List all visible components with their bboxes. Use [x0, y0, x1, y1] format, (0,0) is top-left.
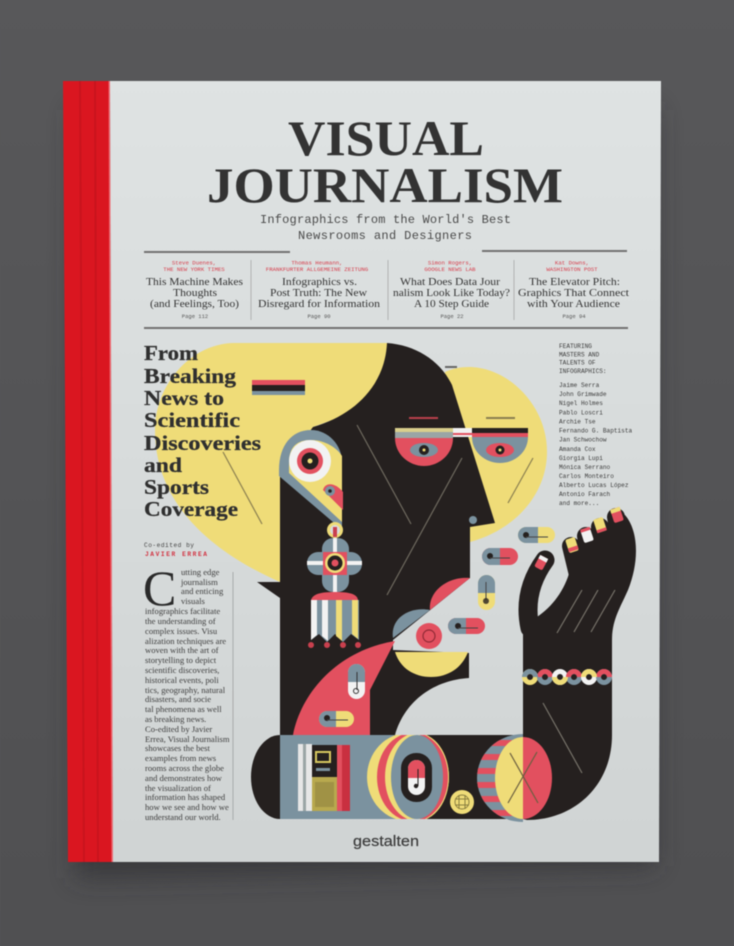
body text: understand our world.: [145, 812, 221, 822]
body text: storytelling to depict: [145, 655, 217, 665]
article teaser: data journalism: Simon Rogers,: [428, 260, 472, 266]
article teaser: infographics vs post truth: [258, 260, 380, 320]
book motif: [298, 744, 350, 811]
featured contributors list: Antonio Farach: [559, 491, 611, 498]
article teaser: elevator pitch: Page 94: [562, 313, 586, 320]
headline: From: [144, 341, 199, 365]
featured contributors list: [559, 343, 632, 507]
subtitle: [260, 213, 511, 243]
featured contributors list: Amanda Cox: [559, 446, 596, 453]
concentric lens: [367, 733, 449, 821]
subtitle: Newsrooms and Designers: [298, 229, 472, 243]
headline: [144, 341, 261, 521]
headline: Discoveries: [144, 431, 261, 455]
front eye left: [395, 417, 473, 466]
body text: as breaking news.: [145, 714, 206, 724]
featured contributors list: INFOGRAPHICS:: [559, 368, 607, 375]
body text: complex issues. Visu: [145, 626, 218, 636]
body text: historical events, poli: [145, 675, 219, 685]
headline: Coverage: [144, 497, 238, 521]
headline: News to: [144, 386, 224, 410]
article teaser: elevator pitch: with Your Audience: [527, 299, 621, 310]
chin semicircle: [393, 609, 430, 638]
body text: showcases the best: [145, 743, 211, 753]
red crescent: [293, 641, 395, 735]
publisher name: gestalten: [353, 833, 419, 850]
body text: scientific discoveries,: [145, 665, 219, 675]
nostril: [469, 516, 477, 524]
body text: utting edge: [181, 567, 220, 577]
headline: Breaking: [144, 364, 237, 388]
red book spine: [63, 81, 113, 862]
article teaser: infographics vs post truth: Thomas Heumann,: [291, 260, 343, 266]
body text: how we see and how we: [145, 802, 229, 812]
article teaser: this machine makes thoughts: This Machine Makes: [146, 277, 243, 288]
featured contributors list: Jan Schwochow: [559, 436, 607, 444]
featured contributors list: Pablo Loscri: [559, 410, 603, 416]
article teaser: infographics vs post truth: Disregard for Information: [258, 299, 380, 310]
earring: [307, 522, 362, 648]
featured contributors list: Alberto Lucas López: [559, 482, 629, 489]
bracelet: [524, 672, 610, 682]
yellow face circle: [445, 367, 547, 542]
hairlines: [223, 367, 533, 595]
body text: and demonstrates how: [145, 773, 223, 783]
featured contributors list: Jaime Serra: [559, 382, 600, 389]
body text: the visualization of: [145, 783, 211, 793]
featured contributors list: Carlos Monteiro: [559, 473, 614, 480]
article teaser: elevator pitch: Graphics That Connect: [518, 288, 629, 299]
yellow half circle: [395, 652, 468, 677]
headline: Scientific: [144, 408, 240, 432]
body text: information has shaped: [145, 792, 226, 802]
article teaser: data journalism: What Does Data Jour: [400, 277, 501, 288]
featured contributors list: Mónica Serrano: [559, 464, 611, 471]
article teaser: elevator pitch: Kat Downs,: [555, 260, 589, 266]
body text: [145, 567, 230, 822]
fingernails: [534, 507, 624, 571]
body text: tal phenomena as well: [145, 704, 222, 714]
article teaser: this machine makes thoughts: Thoughts: [173, 288, 217, 299]
arm and hand: [523, 507, 636, 820]
title: VISUAL: [288, 110, 484, 166]
dash bars: [252, 380, 305, 395]
editor credit: [144, 542, 207, 558]
editor credit: JAVIER ERREA: [145, 551, 207, 558]
body text: Co-edited by Javier: [145, 724, 212, 734]
article teaser: elevator pitch: The Elevator Pitch:: [529, 277, 620, 288]
featured contributors list: Nigel Holmes: [559, 400, 603, 407]
body text: alization techniques are: [145, 636, 226, 646]
article teaser: this machine makes thoughts: Page 112: [182, 313, 208, 320]
pills: [319, 527, 555, 727]
article teaser: data journalism: [393, 260, 511, 320]
bottom band: [251, 735, 523, 819]
headline: and: [144, 453, 182, 477]
body text: examples from news: [145, 753, 217, 763]
drop cap: C: [143, 560, 176, 616]
front eye right: [472, 417, 528, 463]
article teaser: data journalism: nalism Look Like Today?: [393, 288, 511, 299]
featured contributors list: Giorgia Lupi: [559, 455, 603, 462]
body text: rooms across the globe: [145, 763, 224, 773]
book cover scene: [48, 80, 682, 906]
article teaser: data journalism: A 10 Step Guide: [414, 299, 490, 310]
editor credit: Co-edited by: [144, 542, 194, 549]
title: JOURNALISM: [207, 157, 563, 213]
body text: disasters, and socie: [145, 694, 211, 704]
article teaser: this machine makes thoughts: [146, 260, 243, 320]
body text: tics, geography, natural: [145, 685, 226, 695]
article teaser: infographics vs post truth: Page 90: [307, 313, 331, 320]
striped disc: [477, 734, 523, 822]
article teaser: data journalism: GOOGLE NEWS LAB: [424, 266, 476, 273]
small yellow globe: [450, 790, 474, 814]
featured contributors list: FEATURING: [559, 343, 592, 350]
cover panel: [110, 81, 661, 862]
article teaser: data journalism: Page 22: [440, 313, 464, 320]
featured contributors list: MASTERS AND: [559, 352, 600, 358]
article teaser: elevator pitch: [518, 260, 629, 320]
article teaser: this machine makes thoughts: THE NEW YORK TIMES: [163, 266, 225, 273]
featured contributors list: and more...: [559, 500, 599, 507]
featured contributors list: Fernando G. Baptista: [559, 428, 632, 434]
featured contributors list: John Grimwade: [559, 391, 607, 398]
article teaser: infographics vs post truth: FRANKFURTER ALLGEMEINE ZEITUNG: [266, 266, 369, 273]
body text: journalism: [180, 577, 218, 587]
headline: Sports: [144, 475, 209, 499]
article teaser: this machine makes thoughts: Steve Duenes,: [172, 260, 216, 266]
body text: visuals: [181, 596, 206, 606]
illustration: abstract figure: [155, 343, 636, 822]
featured contributors list: TALENTS OF: [559, 360, 596, 367]
body text: and enticing: [181, 586, 224, 596]
side eye: [279, 430, 343, 528]
subtitle: Infographics from the World's Best: [260, 213, 511, 227]
article teaser: this machine makes thoughts: (and Feelings, Too): [150, 299, 239, 310]
lip: [430, 578, 470, 610]
article teaser: infographics vs post truth: Post Truth: The New: [270, 288, 368, 299]
title: [207, 110, 563, 213]
body text: the understanding of: [145, 616, 216, 626]
body text rule: [232, 572, 234, 820]
black wedge: [257, 582, 280, 598]
yellow and red split disc: [495, 737, 552, 819]
black head and torso: [280, 343, 495, 735]
article teaser: infographics vs post truth: Infographics vs.: [282, 277, 357, 288]
featured contributors list: Archie Tse: [559, 418, 596, 426]
red mouth circle: [416, 623, 442, 649]
article teaser: elevator pitch: WASHINGTON POST: [546, 266, 598, 273]
yellow back of head: [155, 343, 387, 582]
body text: Errea, Visual Journalism: [145, 734, 230, 744]
body text: infographics facilitate: [145, 606, 220, 616]
rules and column dividers: [144, 251, 628, 328]
body text: woven with the art of: [145, 645, 219, 655]
